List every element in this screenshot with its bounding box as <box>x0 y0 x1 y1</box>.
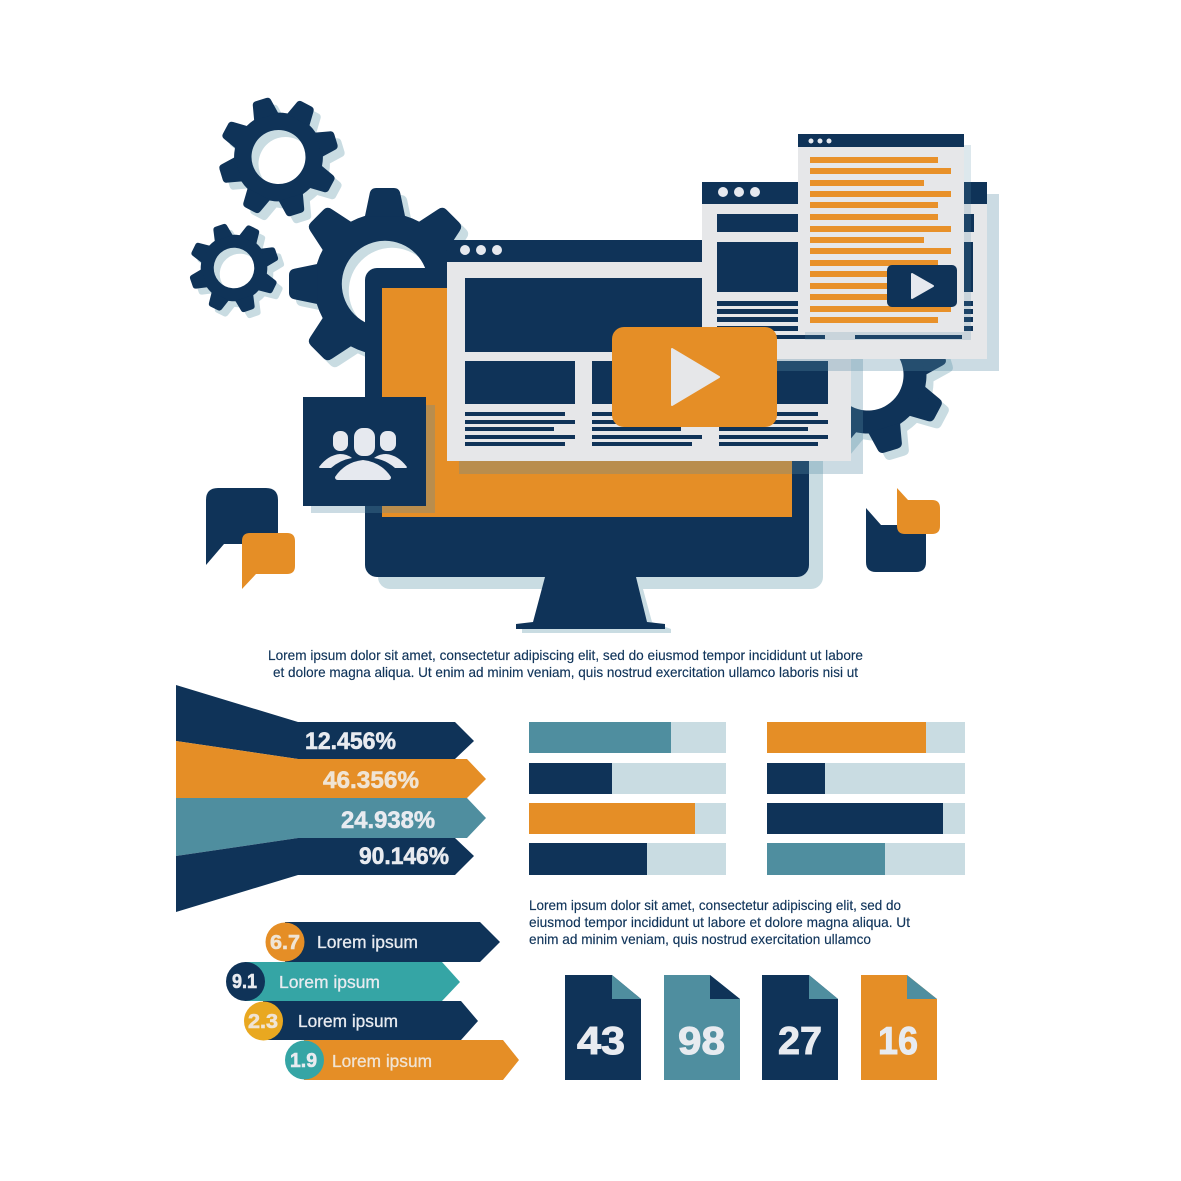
text block: intro: et dolore magna aliqua. Ut enim ad minim veniam, quis nostrud exercitation ullamco laboris nisi ut <box>273 664 858 680</box>
arrow: 24.938%: 24.938% <box>341 807 435 834</box>
arrow: 90.146% <box>176 838 474 912</box>
ribbon: 6.7 <box>266 922 500 962</box>
ribbon: 6.7: 6.7 <box>270 932 300 954</box>
icon: gear top <box>204 82 360 239</box>
file card: 27: 27 <box>778 1020 822 1063</box>
icon: chat bubbles left <box>206 488 295 589</box>
file card: 98 <box>664 975 740 1080</box>
file card: 16: 16 <box>878 1020 918 1063</box>
ribbon: 9.1: 9.1 <box>232 971 257 993</box>
arrow: 24.938% <box>176 798 486 856</box>
bar chart: right <box>767 722 965 875</box>
text block: intro: Lorem ipsum dolor sit amet, consectetur adipiscing elit, sed do eiusmod tempor incididunt ut labore <box>268 647 863 663</box>
file card: 43: 43 <box>577 1020 625 1063</box>
ribbon: 2.3: Lorem ipsum <box>298 1011 398 1031</box>
ribbon: 9.1 <box>226 962 460 1001</box>
ribbon: 2.3: 2.3 <box>248 1011 278 1033</box>
arrow: 90.146%: 90.146% <box>359 843 449 870</box>
arrow: 46.356% <box>176 741 486 798</box>
ribbon: 9.1: Lorem ipsum <box>279 972 380 992</box>
icon: gear large <box>289 188 488 387</box>
text block: description: Lorem ipsum dolor sit amet, consectetur adipiscing elit, sed do <box>529 897 901 913</box>
file card: 98: 98 <box>678 1020 725 1063</box>
file card: 16 <box>861 975 937 1080</box>
icon: small play button <box>887 265 957 307</box>
file card: 27 <box>762 975 838 1080</box>
ribbon: 1.9: Lorem ipsum <box>332 1051 432 1071</box>
arrow: 12.456% <box>176 685 474 759</box>
text block: description: enim ad minim veniam, quis nostrud exercitation ullamco <box>529 931 871 947</box>
icon: gear lower right <box>761 268 982 489</box>
text block: description: eiusmod tempor incididunt ut labore et dolore magna aliqua. Ut <box>529 914 910 930</box>
text block: intro <box>268 647 863 680</box>
window: middle <box>702 182 999 371</box>
ribbon: 6.7: Lorem ipsum <box>317 932 418 952</box>
ribbon: 2.3 <box>244 1001 478 1040</box>
arrow: 12.456%: 12.456% <box>305 728 396 755</box>
file card: 43 <box>565 975 641 1080</box>
arrow: 46.356%: 46.356% <box>323 767 419 794</box>
icon: large play button <box>612 327 777 427</box>
bar chart: left <box>529 722 726 875</box>
chart: funnel arrows <box>176 685 486 912</box>
icon: people box <box>303 397 435 513</box>
ribbon: 1.9 <box>285 1040 519 1080</box>
ribbon: 1.9: 1.9 <box>290 1050 317 1072</box>
icon: gear small <box>177 211 297 331</box>
monitor <box>365 268 823 633</box>
text block: description <box>529 897 910 947</box>
window: main <box>447 240 863 474</box>
window: document <box>798 134 971 340</box>
icon: chat bubbles right <box>866 488 940 572</box>
